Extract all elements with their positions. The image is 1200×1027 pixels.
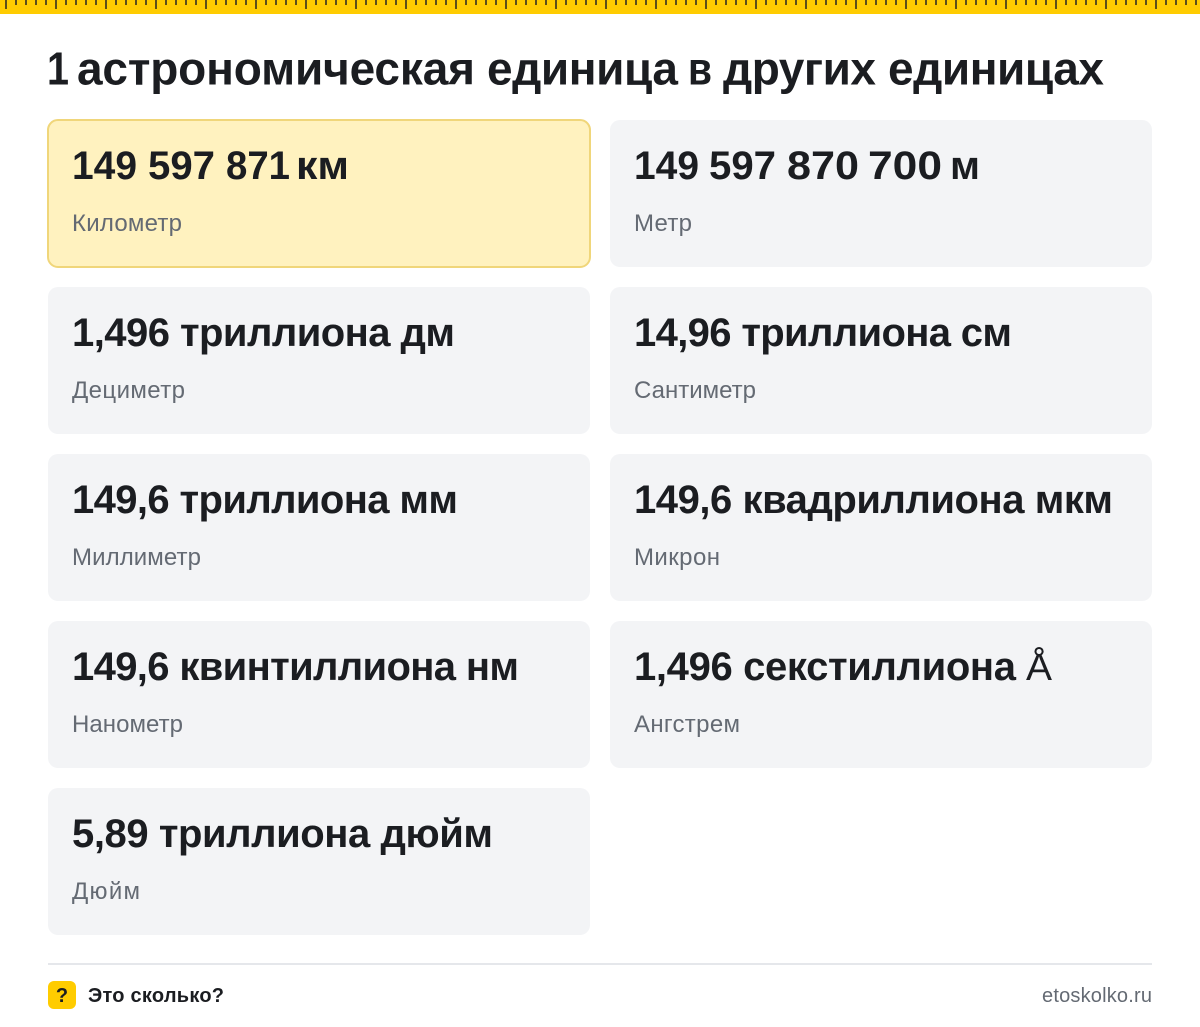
card: decimetre: 1,496 триллиона дм: [72, 311, 455, 355]
card: micron: Микрон: [634, 544, 720, 571]
ruler strip: [0, 0, 1200, 14]
card: centimetre: 14,96 триллиона см: [634, 311, 1012, 355]
card: metre: 149: [634, 144, 699, 188]
card: nanometre: 149,6 квинтиллиона нм: [72, 645, 519, 689]
card: kilometre (highlighted): км: [296, 144, 349, 188]
card: nanometre: [48, 621, 590, 768]
card: micron: 149,6 квадриллиона мкм: [634, 478, 1113, 522]
card: millimetre: [48, 454, 590, 601]
title: единица: [487, 42, 678, 94]
footer brand: Это сколько?: [88, 985, 224, 1007]
card: metre: 597: [709, 144, 776, 188]
footer brand: ?: [56, 985, 68, 1007]
card: millimetre: Миллиметр: [72, 544, 201, 571]
title: [47, 42, 1104, 94]
card: angstrom: 1,496 секстиллиона: [634, 645, 1017, 689]
card: angstrom: Ангстрем: [634, 711, 740, 738]
card: inch: [48, 788, 590, 935]
title: астрономическая: [77, 42, 475, 94]
title: единицах: [888, 42, 1104, 94]
title: в: [688, 42, 712, 94]
card: kilometre (highlighted): 597: [148, 144, 215, 188]
card: kilometre (highlighted): 871: [226, 144, 290, 188]
card: decimetre: [48, 287, 590, 434]
card: nanometre: Нанометр: [72, 711, 183, 738]
card: inch: Дюйм: [72, 878, 140, 905]
card: metre: 870: [787, 144, 859, 188]
card: metre: 700: [868, 144, 942, 188]
title: других: [723, 42, 876, 94]
card: centimetre: [610, 287, 1152, 434]
footer site address: etoskolko.ru: [1042, 985, 1152, 1007]
card: kilometre (highlighted): Километр: [72, 210, 182, 237]
card: decimetre: Дециметр: [72, 377, 185, 404]
card: angstrom: [610, 621, 1152, 768]
card: metre: [610, 120, 1152, 267]
title: 1: [47, 42, 69, 94]
card: kilometre (highlighted): [48, 120, 590, 267]
card: inch: 5,89 триллиона дюйм: [72, 812, 493, 856]
card: angstrom: Å: [1026, 645, 1053, 689]
card: millimetre: 149,6 триллиона мм: [72, 478, 458, 522]
card: centimetre: Сантиметр: [634, 377, 756, 404]
footer brand: [48, 981, 224, 1009]
card: micron: [610, 454, 1152, 601]
card: metre: Метр: [634, 210, 692, 237]
card: metre: м: [950, 144, 980, 188]
card: kilometre (highlighted): 149: [72, 144, 137, 188]
